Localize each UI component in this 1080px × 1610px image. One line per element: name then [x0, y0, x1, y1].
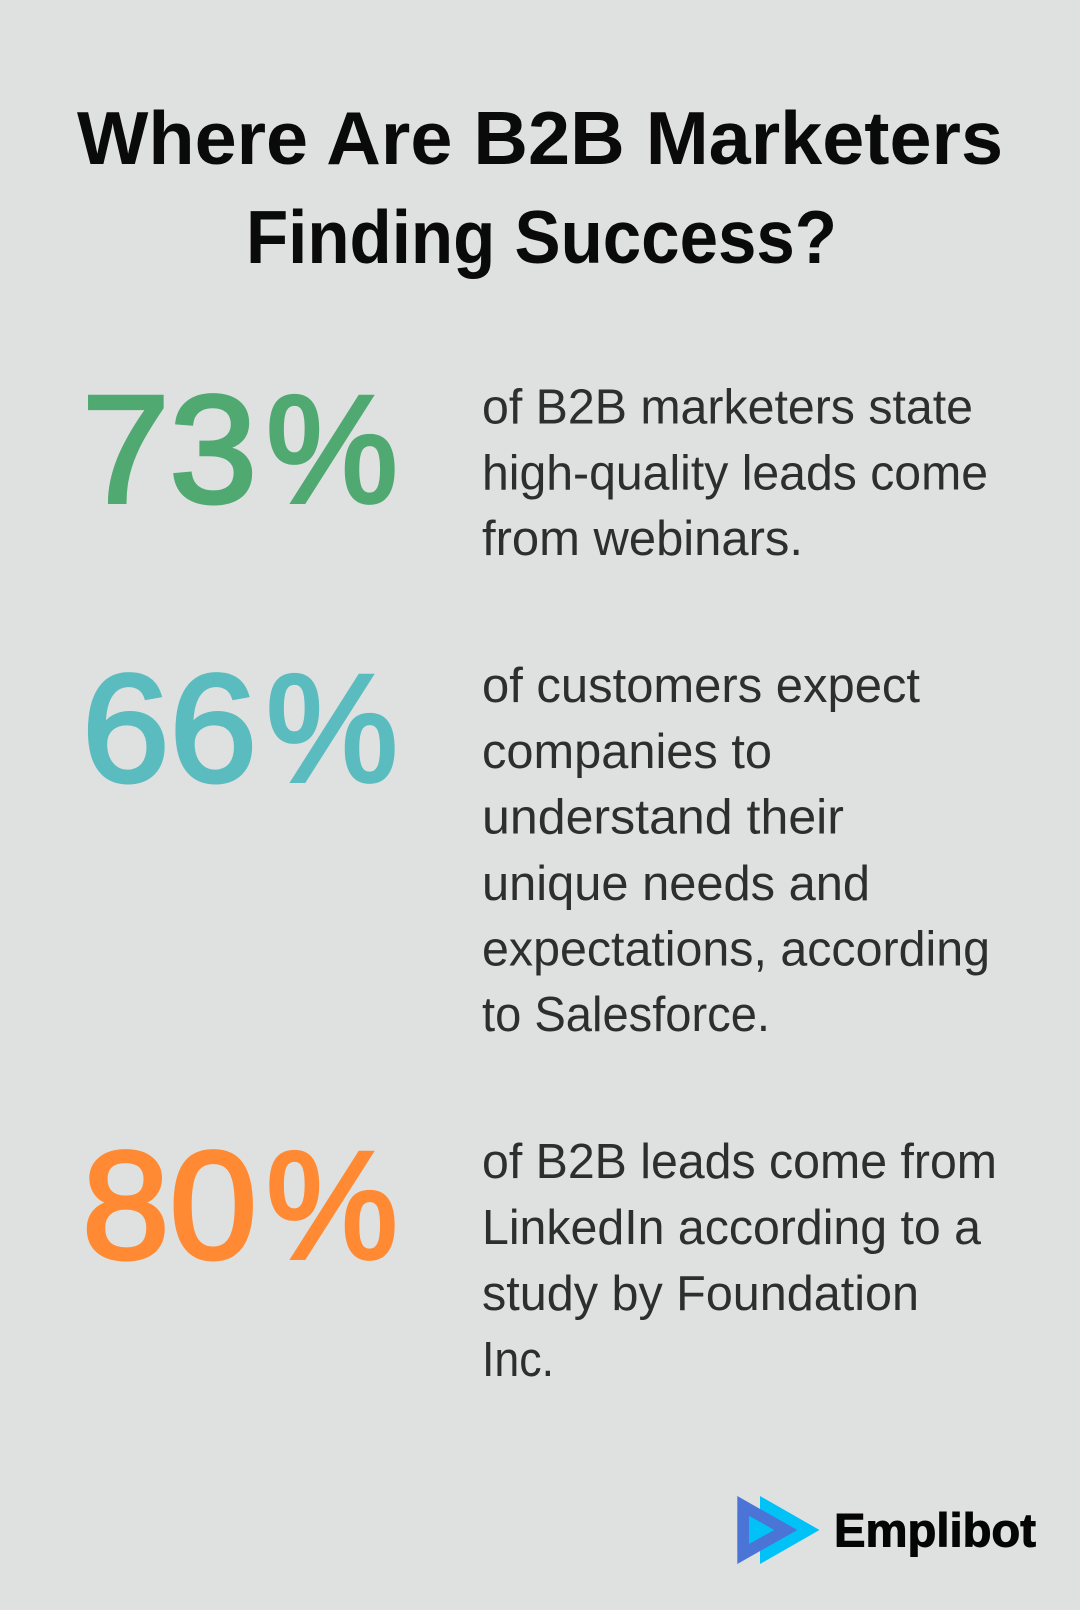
stat description: customers: unique needs and [482, 857, 870, 911]
icon: play triangles [737, 1496, 820, 1564]
stat number: 66%: % [266, 643, 398, 814]
stat description: webinars: from webinars. [482, 512, 803, 566]
stat description: LinkedIn: study by Foundation [482, 1267, 919, 1321]
logo: Emplibot [737, 1496, 1036, 1564]
stat description: webinars: of B2B marketers state [482, 380, 973, 434]
stat description: customers [482, 659, 990, 1042]
stat description: webinars: high-quality leads come [482, 446, 988, 500]
stat description: LinkedIn [482, 1135, 997, 1387]
stat description: webinars [482, 380, 988, 566]
stat row: 80% LinkedIn [82, 1120, 997, 1387]
stat description: LinkedIn: Inc. [482, 1333, 554, 1387]
stat number: 80%: % [266, 1120, 398, 1291]
stat description: LinkedIn: of B2B leads come from [482, 1135, 997, 1189]
stat description: customers: expectations, according [482, 922, 990, 976]
title: Where Are B2B Marketers [77, 96, 1003, 180]
stat number: 73%: 73 [82, 364, 257, 535]
stat row: 66% customers [82, 643, 990, 1042]
stat description: customers: understand their [482, 790, 844, 844]
stat description: customers: to Salesforce. [482, 988, 770, 1042]
stat row: 73% webinars [82, 364, 988, 566]
stat number: 73%: % [266, 364, 398, 535]
title: Finding Success? [246, 195, 837, 279]
stat description: customers: of customers expect [482, 659, 920, 713]
logo wordmark: Emplibot [834, 1504, 1036, 1556]
stat description: LinkedIn: LinkedIn according to a [482, 1201, 982, 1255]
title [77, 96, 1003, 279]
stat number: 66%: 66 [82, 643, 257, 814]
stat description: customers: companies to [482, 725, 772, 779]
stat number: 80%: 80 [82, 1120, 257, 1291]
